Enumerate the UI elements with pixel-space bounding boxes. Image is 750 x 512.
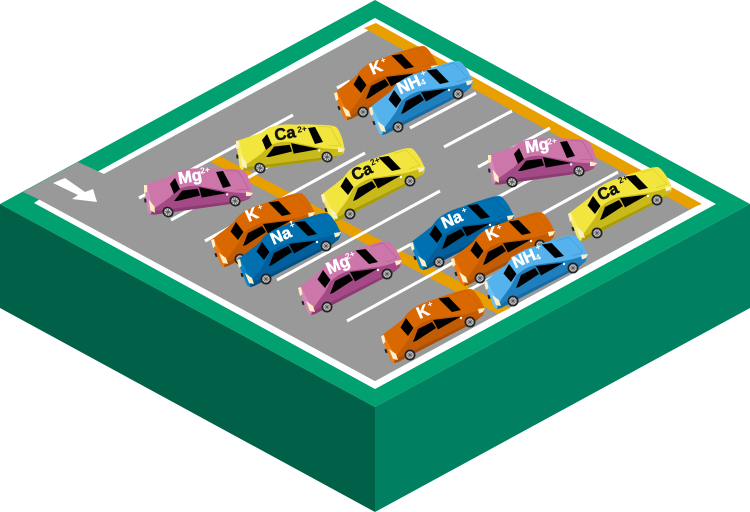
car: Na+ right: Na <box>439 207 466 233</box>
car: K+ bottom: K <box>414 301 432 323</box>
car: Mg2+ right: 2+ <box>546 135 558 147</box>
car: Ca2+ middle: 2+ <box>369 154 381 168</box>
right side face of the block <box>375 204 750 512</box>
car: NH4+ top: + <box>419 67 427 79</box>
car: Na+ right <box>410 196 514 270</box>
car: Ca2+ right: 2+ <box>617 172 629 186</box>
car: Ca2+ middle <box>321 148 425 222</box>
car: K+ bottom <box>381 289 485 363</box>
car: NH4+ right: 4 <box>534 251 542 263</box>
white parking bay lines <box>139 81 618 321</box>
car: NH4+ top <box>369 61 473 135</box>
car: Na+ left: Na <box>268 223 295 249</box>
car: K+ top <box>334 46 438 120</box>
car: Mg2+ left: 2+ <box>199 164 211 176</box>
car: NH4+ right <box>484 235 588 309</box>
car: Ca2+ top <box>230 98 350 200</box>
car: Ca2+ top: 2+ <box>296 123 308 135</box>
orange curb strip along the upper right edge <box>364 23 702 209</box>
car: Mg2+ middle: 2+ <box>344 248 356 262</box>
car: Mg2+ right: Mg <box>524 135 550 157</box>
car: Ca2+ top: Ca <box>273 123 298 145</box>
car: NH4+ top: 4 <box>419 76 427 88</box>
car: Mg2+ left: Mg <box>177 166 203 188</box>
car: K+ middle <box>211 193 315 267</box>
white border of the parking lot <box>34 18 716 389</box>
entrance arrow <box>53 178 97 202</box>
car: Mg2+ left <box>138 142 258 244</box>
car: Ca2+ right <box>568 167 672 241</box>
orange curb strip across the middle <box>207 155 510 314</box>
car: K+ top: + <box>379 54 387 66</box>
car: K+ right: K <box>483 223 501 245</box>
car: K+ right <box>451 212 555 286</box>
green top surface of the block <box>0 0 750 407</box>
grey asphalt parking surface with entrance <box>23 27 700 381</box>
car: K+ top: K <box>367 57 385 79</box>
car: K+ right: + <box>495 221 503 233</box>
car: Mg2+ middle <box>298 241 402 315</box>
car: Ca2+ right: Ca <box>595 179 622 205</box>
car: Na+ left <box>237 213 341 287</box>
car: K+ middle: + <box>256 201 264 213</box>
car: Mg2+ right <box>482 112 602 214</box>
car: Na+ right: + <box>460 204 468 216</box>
car: NH4+ top: NH <box>394 72 424 98</box>
car: Na+ left: + <box>288 219 296 231</box>
car: Ca2+ middle: Ca <box>349 159 376 185</box>
car: K+ middle: K <box>243 204 261 226</box>
left side face of the block <box>0 204 375 512</box>
car: NH4+ right: + <box>534 241 542 253</box>
car: NH4+ right: NH <box>509 246 539 272</box>
car: K+ bottom: + <box>426 298 434 310</box>
car: Mg2+ middle: Mg <box>323 252 353 278</box>
